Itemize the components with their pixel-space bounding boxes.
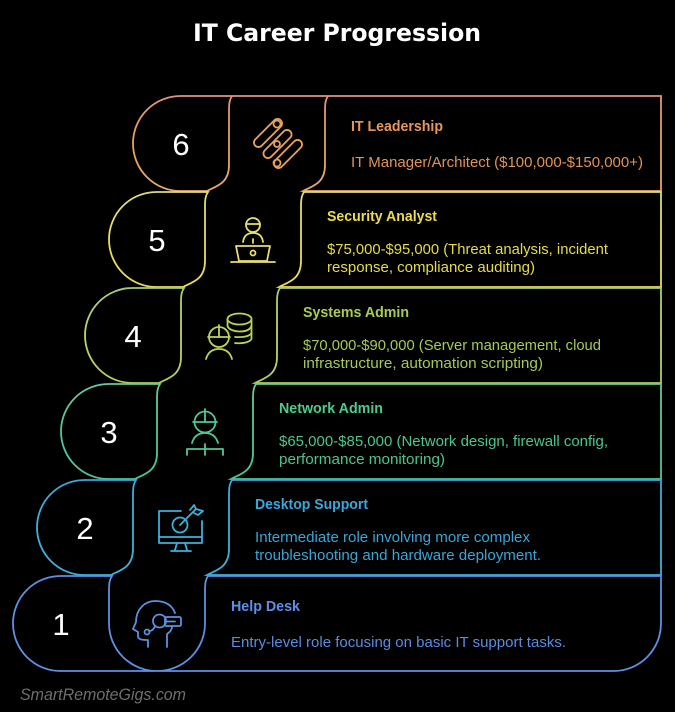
content panel 5 outline (279, 192, 661, 287)
text: role description (255, 530, 541, 564)
title: IT Career Progression (193, 19, 481, 47)
number tab 3 outline (61, 384, 160, 479)
number tab 4 outline (85, 288, 184, 383)
icon: monitor with target (159, 505, 203, 551)
number tab 2 outline (37, 480, 136, 575)
panel: level 2 Desktop Support (37, 480, 661, 575)
number tab 6 outline (133, 96, 661, 191)
icon: head with headset (133, 601, 181, 647)
icon: leadership sliders (252, 117, 304, 170)
number 2: 2 (76, 511, 94, 546)
number 1: 1 (52, 607, 70, 642)
number 5: 5 (148, 223, 166, 258)
text: role detail: IT Manager/Architect ($100,000-$150,000+) (351, 155, 643, 171)
base outline with number tab 1 (13, 576, 661, 671)
number 4: 4 (124, 319, 142, 354)
panel: level 1 Help Desk (13, 576, 661, 671)
content panel 3 outline (231, 384, 661, 479)
text: salary and duties: performance monitoring) (279, 452, 445, 468)
icon: analyst at laptop (231, 218, 275, 262)
heading: IT Leadership: IT Leadership (351, 119, 443, 135)
panel: level 3 Network Admin (61, 384, 661, 479)
icon: engineer with network (187, 409, 223, 455)
content panel 2 outline (207, 480, 661, 575)
icon: admin with database (206, 314, 252, 359)
watermark: SmartRemoteGigs.com (20, 686, 186, 704)
text: salary and duties: $70,000-$90,000 (Server management, cloud (303, 338, 601, 354)
heading: Systems Admin: Systems Admin (303, 305, 409, 321)
content panel 4 outline (255, 288, 661, 383)
text: salary and duties (303, 338, 601, 372)
panel: level 4 Systems Admin (85, 288, 661, 383)
heading: Network Admin: Network Admin (279, 401, 383, 417)
text: salary and duties: response, compliance auditing) (327, 260, 535, 276)
heading: Desktop Support: Desktop Support (255, 497, 368, 513)
heading: Security Analyst: Security Analyst (327, 209, 437, 225)
text: role description: troubleshooting and hardware deployment. (255, 548, 541, 564)
text: role description: Entry-level role focusing on basic IT support tasks. (231, 635, 566, 651)
text: salary and duties (279, 434, 608, 468)
text: salary and duties: infrastructure, automation scripting) (303, 356, 543, 372)
text: salary and duties: $65,000-$85,000 (Network design, firewall config, (279, 434, 608, 450)
text: salary and duties: $75,000-$95,000 (Threat analysis, incident (327, 242, 608, 258)
text: salary and duties (327, 242, 608, 276)
number tab 5 outline (109, 192, 208, 287)
heading: Help Desk: Help Desk (231, 599, 301, 615)
number 3: 3 (100, 415, 118, 450)
panel: level 5 Security Analyst (109, 192, 661, 287)
panel: level 6 IT Leadership (133, 96, 661, 191)
number 6: 6 (172, 127, 190, 162)
text: role description: Intermediate role involving more complex (255, 530, 531, 546)
